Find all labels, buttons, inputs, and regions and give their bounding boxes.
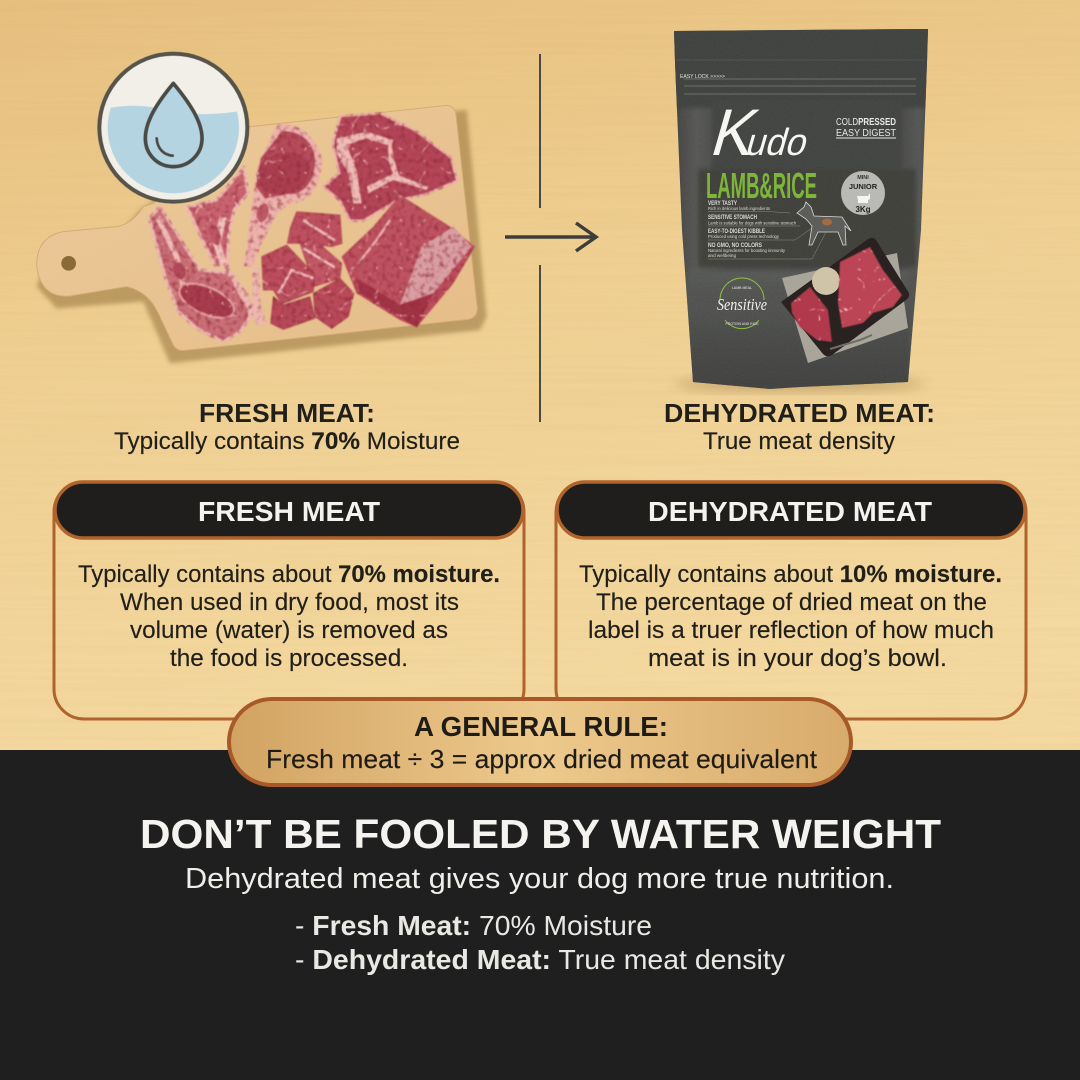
panel body text: fresh meat: When used in dry food, most its [120, 589, 459, 616]
sensitive badge [717, 278, 767, 329]
sensitive badge: Sensitive [717, 295, 767, 314]
feature list on bag: Natural ingredients for boosting immunity [708, 248, 786, 253]
panel header: dehydrated meat: DEHYDRATED MEAT [648, 496, 932, 527]
cold pressed tagline: EASY DIGEST [836, 127, 896, 139]
icon: water drop badge [99, 54, 247, 203]
feature list on bag: VERY TASTY [708, 201, 737, 207]
mini junior badge: MINI [857, 175, 869, 181]
cutting board with fresh meat [37, 105, 487, 363]
arrow [505, 223, 596, 251]
feature list on bag: EASY-TO-DIGEST KIBBLE [708, 229, 765, 235]
feature list on bag: Produced using cold press technology [708, 234, 780, 239]
sensitive badge: PROTEIN AND RICE [725, 322, 759, 326]
panel body text: dehydrated meat [579, 561, 1002, 672]
feature list on bag: Lamb is suitable for dogs with sensitive stomach [708, 220, 796, 226]
cold pressed tagline [836, 116, 896, 139]
panel header: dehydrated meat [557, 482, 1025, 538]
mini junior badge: 3Kg [855, 205, 871, 214]
product bag: Kudo lamb and rice [660, 20, 940, 395]
divider line with arrow [505, 54, 596, 422]
callout: general rule [229, 699, 851, 785]
caption: dehydrated meat: DEHYDRATED MEAT: [664, 398, 935, 428]
panel: fresh meat [54, 482, 524, 719]
caption: dehydrated meat [664, 398, 935, 455]
dark bottom panel [0, 750, 1080, 1080]
bullet list: - Dehydrated Meat: True meat density [295, 944, 785, 975]
board shape [37, 105, 477, 351]
meat tray on bag [781, 238, 909, 363]
chop centre [244, 124, 322, 325]
panel: dehydrated meat [556, 482, 1026, 719]
caption: fresh meat [114, 398, 460, 455]
meat block [342, 195, 475, 327]
sensitive badge: LAMB MEAL [732, 286, 752, 290]
lamb and rice title: LAMB&RICE [706, 165, 817, 206]
panel body text: fresh meat: volume (water) is removed as [130, 617, 448, 644]
wood background [0, 0, 1080, 752]
panel body text: dehydrated meat: label is a truer reflection of how much [588, 617, 994, 644]
panel body text: fresh meat: Typically contains about 70% moisture. [78, 561, 500, 588]
handle hole [61, 256, 76, 271]
panel body text: fresh meat [78, 561, 500, 672]
chop second [187, 167, 266, 325]
feature list on bag: SENSITIVE STOMACH [708, 215, 757, 221]
meat cubes [262, 212, 354, 329]
panel body text: dehydrated meat: meat is in your dog’s bowl. [648, 645, 947, 672]
Kudo logo: Kudo [704, 96, 821, 170]
cold pressed tagline: COLDPRESSED [836, 116, 896, 128]
feature list on bag: Rich in delicious lamb ingredients [708, 206, 771, 211]
bullet list [295, 910, 785, 975]
caption: dehydrated meat: True meat density [703, 428, 895, 455]
chop lower left [149, 207, 250, 342]
panel body text: dehydrated meat: The percentage of dried meat on the [596, 589, 987, 616]
bullet list: - Fresh Meat: 70% Moisture [295, 910, 652, 941]
callout: general rule: Fresh meat ÷ 3 = approx dried meat equivalent [266, 744, 818, 774]
panel body text: fresh meat: the food is processed. [170, 645, 408, 672]
panel header: fresh meat: FRESH MEAT [198, 496, 380, 527]
mini junior badge [841, 171, 885, 215]
feature list on bag: and wellbeing [708, 253, 736, 258]
caption: fresh meat: FRESH MEAT: [199, 398, 375, 428]
dog illustration [797, 202, 851, 245]
feature list on bag: NO GMO, NO COLORS [708, 243, 762, 249]
heading: water weight: DON’T BE FOOLED BY WATER WEIGHT [140, 811, 941, 857]
panel body text: dehydrated meat: Typically contains about 10% moisture. [579, 561, 1002, 588]
caption: fresh meat: Typically contains 70% Moisture [114, 428, 460, 455]
feature list on bag [708, 201, 826, 259]
easy lock label: EASY LOCK >>>>> [680, 74, 725, 80]
steak top right [323, 113, 457, 221]
subheading: Dehydrated meat gives your dog more true nutrition. [185, 863, 894, 895]
mini junior badge: JUNIOR [849, 182, 878, 191]
panel header: fresh meat [55, 482, 523, 538]
callout: general rule: A GENERAL RULE: [414, 711, 668, 742]
product bag shadow [675, 376, 925, 392]
